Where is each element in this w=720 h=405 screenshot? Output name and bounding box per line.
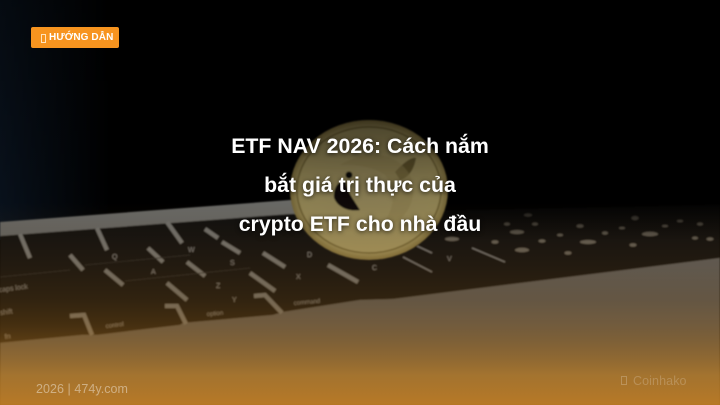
key legends: W <box>188 247 195 254</box>
fade of the keyboard top into shadow <box>440 196 720 240</box>
title: crypto ETF cho nhà đầu <box>239 212 481 236</box>
dog face marks <box>334 182 360 210</box>
key legends: fn <box>4 333 11 341</box>
keyboard well <box>0 205 720 343</box>
title <box>231 134 489 236</box>
key legends: X <box>296 274 301 281</box>
key legends: V <box>447 256 452 263</box>
key legends: Q <box>112 254 118 261</box>
key legends: control <box>106 322 124 330</box>
key gaps <box>20 222 358 335</box>
key legends: Y <box>232 297 237 304</box>
badge: guide: HƯỚNG DẪN <box>49 32 113 43</box>
right keyboard legends <box>445 214 714 255</box>
year and site footer: 2026 | 474y.com <box>36 382 128 396</box>
laptop deck <box>0 200 720 405</box>
title: ETF NAV 2026: Cách nắm <box>231 134 489 158</box>
key legends: D <box>307 252 312 259</box>
key legends: C <box>372 265 377 272</box>
key legends: S <box>230 260 235 267</box>
badge: guide <box>31 27 119 48</box>
key legends: option <box>207 311 223 318</box>
key legends: A <box>151 269 156 276</box>
title: bắt giá trị thực của <box>264 173 456 197</box>
coin <box>290 120 448 260</box>
key legends: Z <box>216 283 221 290</box>
key legends: command <box>294 299 320 307</box>
source credit: Coinhako <box>633 374 687 388</box>
key legends <box>0 247 452 341</box>
